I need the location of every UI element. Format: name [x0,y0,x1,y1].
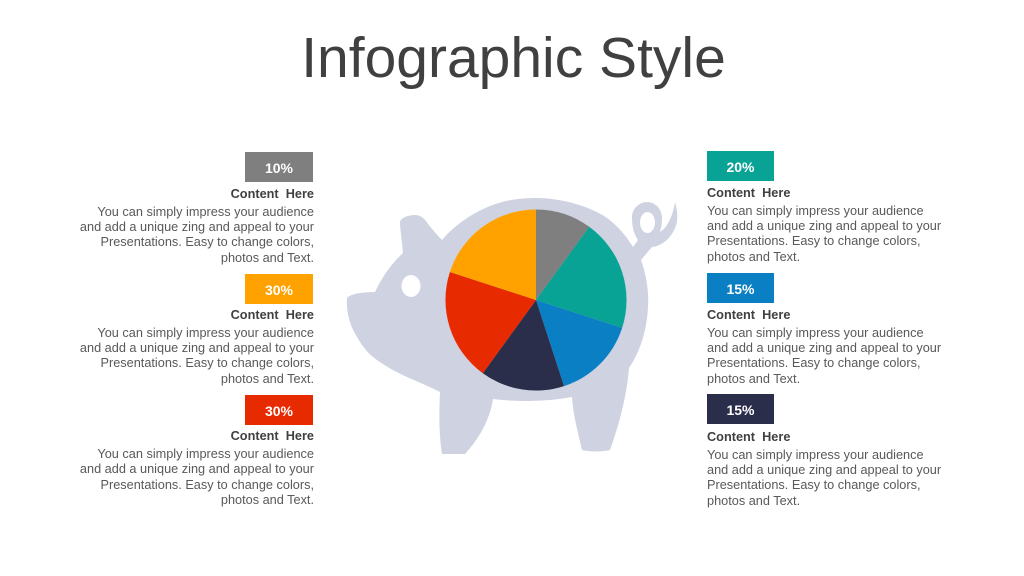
badge 30% orange: 30% [265,282,293,298]
text block: 30% red [80,428,314,507]
text block: 15% blue [707,306,941,386]
text block: 30% red: and add a unique zing and appeal to your [80,461,314,476]
text block: 15% blue: Presentations. Easy to change colors, [707,355,921,370]
text block: 30% orange: Presentations. Easy to change colors, [100,355,314,370]
text block: 15% navy: You can simply impress your audience [707,446,924,462]
text block: 30% orange: photos and Text. [221,371,314,386]
text block: 10%: You can simply impress your audience [97,204,314,218]
pig eye [402,275,420,297]
text block: 15% navy: Presentations. Easy to change colors, [707,477,921,492]
text block: 15% blue: Content Here [707,306,790,322]
text block: 30% red: photos and Text. [221,492,314,507]
text block: 20%: Presentations. Easy to change colors, [707,233,921,248]
badge 20%: 20% [726,159,755,175]
text block: 15% navy: Content Here [707,428,790,444]
badge 20% [707,151,774,181]
badge 30% red [245,395,313,425]
badge 15% navy [707,394,774,424]
text block: 15% blue: and add a unique zing and appeal to your [707,340,941,355]
badge 15% navy: 15% [726,402,755,418]
title: Infographic Style [301,26,726,90]
text block: 30% red: Content Here [231,428,314,443]
text block: 30% orange: Content Here [231,306,314,322]
badge 15% blue: 15% [726,281,755,297]
pig silhouette [347,198,677,454]
text block: 15% navy: and add a unique zing and appeal to your [707,462,941,477]
text block: 20%: You can simply impress your audience [707,202,924,218]
text block: 30% red: You can simply impress your audience [97,446,314,461]
text block: 20%: and add a unique zing and appeal to your [707,218,941,233]
badge 30% red: 30% [265,403,293,419]
text block: 30% orange: You can simply impress your audience [97,324,314,340]
text block: 20% [707,184,941,264]
badge 15% blue [707,273,774,303]
text block: 15% blue: photos and Text. [707,371,800,386]
badge 30% orange [245,274,313,304]
text block: 20%: photos and Text. [707,249,800,264]
text block: 10%: Presentations. Easy to change colors, [100,234,314,249]
text block: 20%: Content Here [707,184,790,200]
text block: 15% navy: photos and Text. [707,493,800,508]
text block: 30% red: Presentations. Easy to change colors, [100,477,314,492]
text block: 10% [80,186,314,265]
badge 10% [245,152,313,182]
text block: 30% orange: and add a unique zing and appeal to your [80,340,314,355]
badge 10%: 10% [265,160,293,176]
text block: 15% navy [707,428,941,508]
text block: 10%: photos and Text. [221,250,314,265]
text block: 30% orange [80,306,314,386]
text block: 10%: Content Here [231,186,314,200]
pie chart [445,210,627,391]
text block: 15% blue: You can simply impress your audience [707,324,924,340]
text block: 10%: and add a unique zing and appeal to your [80,219,314,234]
